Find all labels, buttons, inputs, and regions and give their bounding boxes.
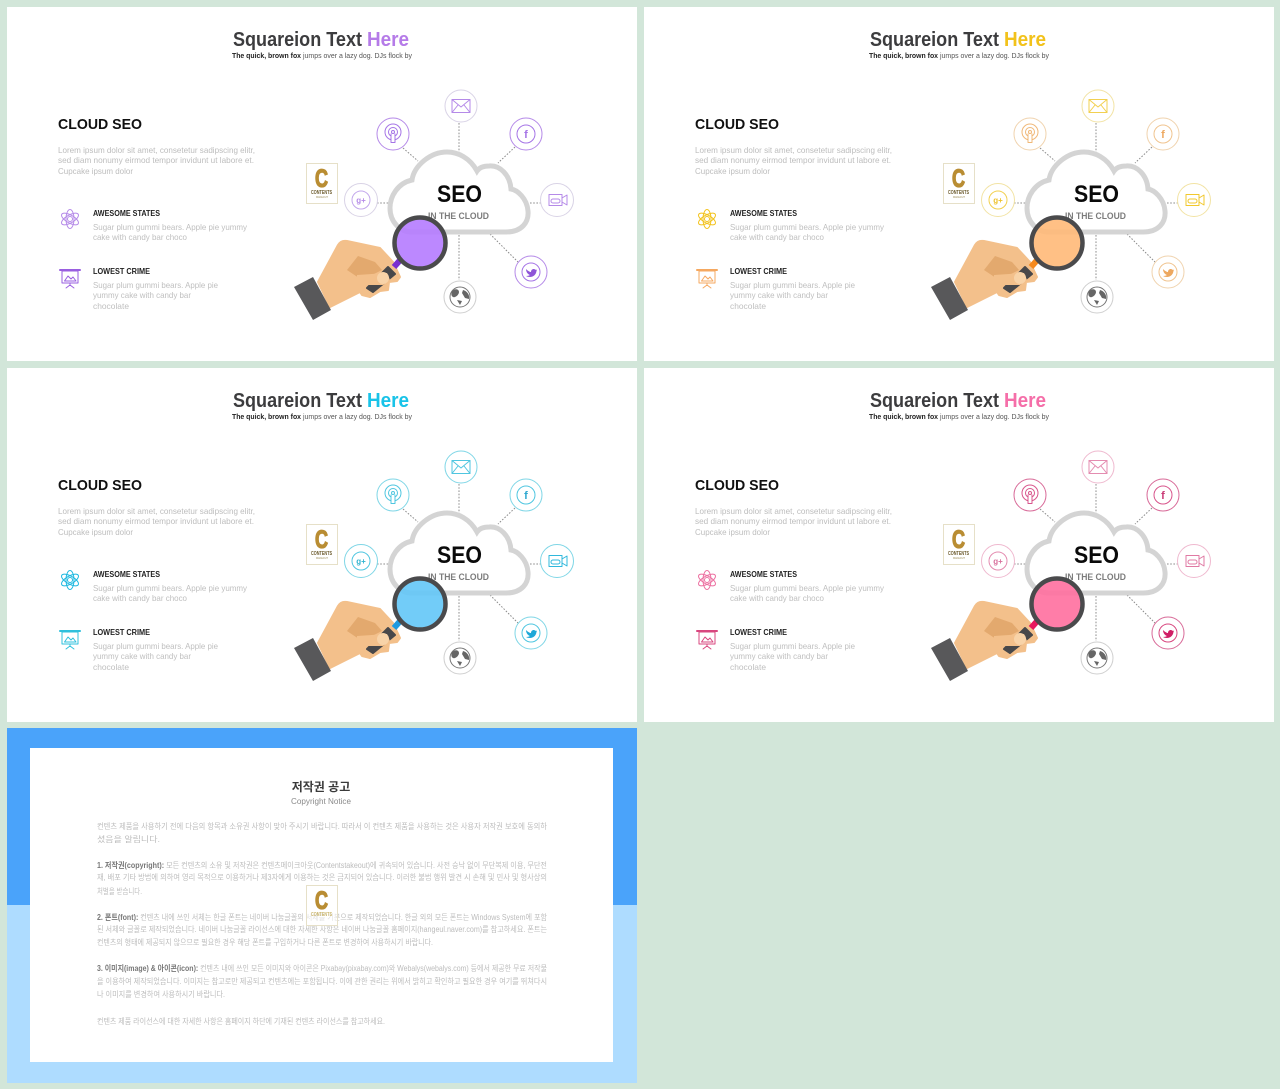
intro text: Cupcake ipsum dolor [58,166,133,176]
intro text: Cupcake ipsum dolor [695,527,770,537]
icon: mail [1082,451,1114,483]
icon: globe [444,281,476,313]
title: Squareion Text [870,390,999,412]
item: awesome states [730,209,885,242]
cloud: SEO [1074,542,1119,569]
logo: contents [944,524,974,564]
item: lowest crime: yummy cake with candy bar [730,651,828,661]
icon: google plus [344,184,378,216]
item: awesome states: Sugar plum gummi bears. Apple pie yummy [93,222,248,232]
logo: contents: C [315,165,328,193]
item: lowest crime [730,628,855,672]
item: lowest crime: yummy cake with candy bar [93,651,191,661]
icon: google plus: g+ [993,557,1003,566]
blue upper band [7,728,637,905]
intro text: sed diam nonumy eirmod tempor invidunt ut labore et. [695,516,891,526]
paragraph: font: 컨텐츠의 형태에 제공되지 않으므로 필요한 경우 해당 폰트를 구입하거나 다른 폰트로 변경하여 사용하시기 바랍니다. [97,937,433,947]
icon: globe [1081,642,1113,674]
icon: presentation board [60,631,80,649]
paragraph: copyright: 재, 배포 기타 방법에 의하여 영리 목적으로 이용하거나 제3자에게 이용하는 것은 금지되어 있습니다. 이러한 불법 행위 발견 시 손해 및 민사 및 형사상의 [97,872,547,882]
panel: copyright notice slide [7,728,637,1083]
cloud: IN THE CLOUD [1065,211,1126,222]
paragraph: font [97,912,548,947]
icon: podcast [377,118,409,150]
cloud: SEO [437,542,482,569]
item: lowest crime: LOWEST CRIME [730,267,788,276]
cloud: IN THE CLOUD [428,572,489,583]
logo: contents watermark [306,886,338,926]
item: awesome states: cake with candy bar choco [730,593,824,603]
cloud: SEO [1074,181,1119,208]
subtitle: The quick, brown fox [232,414,301,421]
paragraph: image and icon: 을 이용하여 제작되었습니다. 이미지는 참고로만 제공되고 컨텐츠에는 포함됩니다. 이에 관한 권리는 위에서 밝히고 확인하고 필요한 경우 여기를 뛰쳐다시 [97,976,547,986]
logo: contents: MAKEOUT [953,556,965,560]
item: awesome states: AWESOME STATES [93,570,161,579]
cloud [390,513,528,593]
connector lines [377,123,542,280]
item: awesome states: cake with candy bar choco [93,232,187,242]
item: lowest crime: LOWEST CRIME [93,628,151,637]
subtitle: The quick, brown fox [869,53,938,60]
white notice card [30,748,613,1062]
icon: globe [444,642,476,674]
heading: cloud seo: CLOUD SEO [695,116,779,133]
connector lines [1014,123,1179,280]
logo: contents: CONTENTS [948,551,970,557]
item: lowest crime: LOWEST CRIME [93,267,151,276]
item: lowest crime: yummy cake with candy bar [93,290,191,300]
subtitle: The quick, brown fox [869,414,938,421]
subtitle: jumps over a lazy dog. DJs flock by [939,414,1049,421]
icon: atom [697,570,717,590]
icon: presentation board [697,631,717,649]
logo: contents: CONTENTS [311,190,333,196]
closing line: 컨텐츠 제품 라이선스에 대한 자세한 사항은 홈페이지 하단에 기재된 컨텐츠 라이선스를 참고하세요. [97,1016,385,1026]
logo: contents watermark: C [315,887,328,915]
icon: facebook [1147,118,1179,150]
icon: atom [60,210,80,228]
logo: contents: MAKEOUT [953,195,965,199]
icon: google plus: g+ [356,196,366,205]
icon: facebook [510,479,542,511]
item: awesome states: cake with candy bar choco [93,593,187,603]
icon: podcast [1014,479,1046,511]
icon: podcast [1014,118,1046,150]
icon: twitter [1152,256,1184,288]
intro paragraph: 컨텐츠 제품을 사용하기 전에 다음의 항목과 소유권 사항이 맞아 주시기 바랍니다. 따라서 이 컨텐츠 제품을 사용하는 것은 사용자 저작권 보호에 동의하 [97,821,548,831]
subtitle [869,414,1049,421]
icon: atom [60,570,80,590]
intro text [58,506,255,537]
icon: twitter [1152,617,1184,649]
paragraph: font: 2. 폰트(font): 컨텐츠 내에 쓰인 서체는 한글 폰트는 네이버 나눔글꼴의 서체를 기본으로 제작되었습니다. 한글 외의 모든 폰트는 Windows System에 포함 [97,912,548,922]
cloud: IN THE CLOUD [1065,572,1126,583]
item: lowest crime: Sugar plum gummi bears. Apple pie [730,641,855,651]
title: Here [1004,29,1046,51]
icon: google plus [982,544,1014,578]
item: lowest crime [93,628,218,672]
icon: presentation board [697,270,717,288]
intro text: sed diam nonumy eirmod tempor invidunt ut labore et. [695,155,891,165]
heading: cloud seo: CLOUD SEO [58,116,142,133]
cloud [1027,513,1165,593]
icon: facebook: f [1161,129,1165,141]
intro text: Lorem ipsum dolor sit amet, consetetur sadipscing elitr, [58,506,255,516]
intro text [695,506,892,537]
subtitle [869,53,1049,60]
logo: contents [944,164,974,204]
icon: globe [1081,281,1113,313]
icon: twitter [515,256,547,288]
panel: yellow cloud SEO slide [644,7,1274,361]
icon: mail [445,90,477,122]
paragraph: image and icon: 나 이미지를 변경하여 사용하시기 바랍니다. [97,989,225,999]
item: lowest crime: chocolate [730,301,766,311]
icon: atom [697,210,717,228]
intro text: Cupcake ipsum dolor [695,166,770,176]
hand holding magnifier [294,218,446,320]
item: awesome states: AWESOME STATES [93,209,161,218]
connector lines [377,484,542,641]
title: Squareion Text [870,29,999,51]
item: lowest crime: chocolate [93,301,129,311]
logo: contents: C [952,165,965,193]
title: Here [367,390,409,412]
item: lowest crime: chocolate [93,662,129,672]
icon: facebook [510,118,542,150]
item: lowest crime: LOWEST CRIME [730,628,788,637]
logo: contents [306,164,338,204]
paragraph: copyright: 처벌을 받습니다. [97,886,142,896]
icon: video camera [540,184,574,216]
logo: contents [306,524,338,564]
icon: facebook: f [1161,490,1165,502]
hand holding magnifier [931,218,1082,320]
paragraph: copyright [97,860,547,896]
notice title: 저작권 공고 [292,779,350,794]
title: Squareion Text [233,29,362,51]
logo: contents watermark: CONTENTS [311,912,333,918]
subtitle: jumps over a lazy dog. DJs flock by [302,414,412,421]
item: lowest crime: Sugar plum gummi bears. Apple pie [730,280,855,290]
cloud: IN THE CLOUD [428,211,489,222]
item: lowest crime [93,267,218,311]
item: awesome states [93,570,248,603]
icon: video camera [540,544,574,578]
intro text: Lorem ipsum dolor sit amet, consetetur sadipscing elitr, [58,145,255,155]
icon: podcast [377,479,409,511]
item: awesome states [730,570,885,603]
icon: google plus [344,544,378,578]
heading: cloud seo: CLOUD SEO [58,477,142,494]
panel: pink cloud SEO slide [644,368,1274,722]
icon: presentation board [60,270,80,288]
hand holding magnifier [294,578,446,681]
subtitle: The quick, brown fox [232,53,301,60]
intro text: Lorem ipsum dolor sit amet, consetetur sadipscing elitr, [695,145,892,155]
connector lines [1014,484,1179,641]
icon: google plus [982,184,1014,216]
icon: video camera [1178,544,1210,578]
item: awesome states: Sugar plum gummi bears. Apple pie yummy [730,583,885,593]
paragraph: image and icon: 3. 이미지(image) & 아이콘(icon): 컨텐츠 내에 쓰인 모든 이미지와 아이콘은 Pixabay(pixabay.com)와 Webalys(webalys.com) 등에서 제공한 무료 저작물 [97,963,547,973]
logo: contents: CONTENTS [311,551,333,557]
icon: facebook: f [524,129,528,141]
panel: purple cloud SEO slide [7,7,637,361]
heading: cloud seo: CLOUD SEO [695,477,779,494]
intro text: sed diam nonumy eirmod tempor invidunt ut labore et. [58,155,254,165]
intro text [58,145,255,176]
cloud [390,152,528,232]
paragraph: image and icon [97,963,547,999]
notice subtitle: Copyright Notice [291,797,352,806]
intro text: Lorem ipsum dolor sit amet, consetetur sadipscing elitr, [695,506,892,516]
icon: mail [1082,90,1114,122]
logo: contents: CONTENTS [948,190,970,196]
panel: cyan cloud SEO slide [7,368,637,722]
subtitle [232,414,412,421]
intro text: sed diam nonumy eirmod tempor invidunt ut labore et. [58,516,254,526]
item: awesome states: AWESOME STATES [730,209,798,218]
item: awesome states: AWESOME STATES [730,570,798,579]
title: Here [1004,390,1046,412]
cloud [1027,152,1165,232]
item: lowest crime: Sugar plum gummi bears. Apple pie [93,280,218,290]
intro text [695,145,892,176]
item: awesome states: cake with candy bar choco [730,232,824,242]
logo: contents: C [315,526,328,554]
item: lowest crime: yummy cake with candy bar [730,290,828,300]
item: awesome states: Sugar plum gummi bears. Apple pie yummy [730,222,885,232]
icon: google plus: g+ [356,557,366,566]
logo: contents: MAKEOUT [316,195,328,199]
logo: contents: MAKEOUT [316,556,328,560]
icon: twitter [515,617,547,649]
subtitle [232,53,412,60]
intro paragraph [97,821,548,844]
intro text: Cupcake ipsum dolor [58,527,133,537]
icon: facebook [1147,479,1179,511]
cloud: SEO [437,181,482,208]
title: Squareion Text [233,390,362,412]
title: Here [367,29,409,51]
icon: mail [445,451,477,483]
item: lowest crime: Sugar plum gummi bears. Apple pie [93,641,218,651]
item: awesome states: Sugar plum gummi bears. Apple pie yummy [93,583,248,593]
item: awesome states [93,209,248,242]
item: lowest crime [730,267,855,311]
icon: google plus: g+ [993,196,1003,205]
icon: video camera [1178,184,1210,216]
paragraph: font: 된 서체와 글꼴로 제작되었습니다. 네이버 나눔글꼴 라이선스에 대한 자세한 사항은 네이버 나눔글꼴 홈페이지(hangeul.naver.com)를 참고하세요. 폰트는 [97,924,547,934]
item: lowest crime: chocolate [730,662,766,672]
hand holding magnifier [931,578,1082,681]
paragraph: copyright: 1. 저작권(copyright): 모든 컨텐츠의 소유 및 저작권은 컨텐츠메이크아웃(Contentstakeout)에 귀속되어 있습니다. 사전 승낙 없이 무단복제 이용, 무단전 [97,860,547,870]
subtitle: jumps over a lazy dog. DJs flock by [939,53,1049,60]
logo: contents: C [952,526,965,554]
subtitle: jumps over a lazy dog. DJs flock by [302,53,412,60]
intro paragraph: 셨음을 알립니다. [97,834,160,844]
icon: facebook: f [524,490,528,502]
